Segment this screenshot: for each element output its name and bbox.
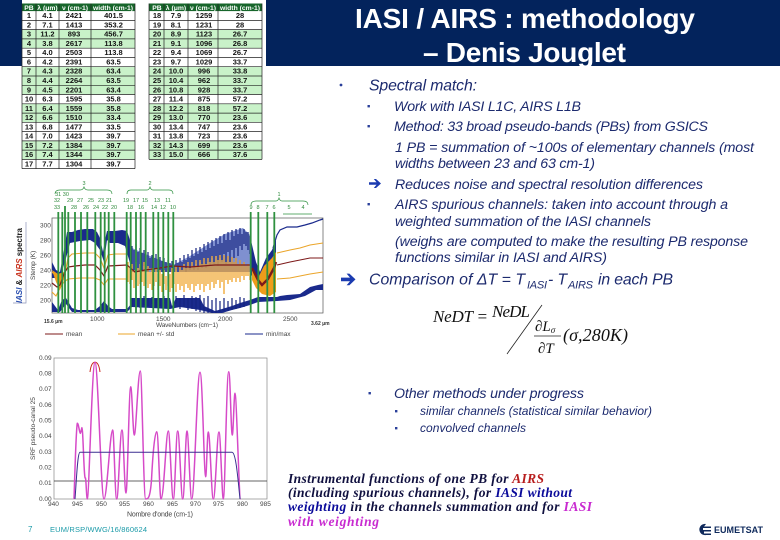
table: pseudo-bands 1 to 17: 4.0 (42, 48, 53, 57)
band number labels and brackets: 11 (165, 198, 171, 204)
table: pseudo-bands 1 to 17: 63.4 (106, 85, 122, 94)
axis labels: 3.62 μm (311, 321, 330, 327)
band number labels and brackets: 15 (142, 198, 148, 204)
table: pseudo-bands 18 to 33: 747 (198, 122, 210, 131)
table: pseudo-bands 18 to 33: 10.8 (169, 85, 183, 94)
table: pseudo-bands 1 to 17: 353.2 (104, 20, 123, 29)
spectral match sub-bullets: AIRS spurious channels: taken into account through a (394, 197, 728, 213)
legend: min/max (266, 331, 291, 338)
table: pseudo-bands 1 to 17: 35.8 (106, 104, 121, 113)
table: pseudo-bands 18 to 33: 1029 (196, 58, 212, 66)
table: pseudo-bands 18 to 33: 11.4 (169, 94, 184, 104)
table: pseudo-bands 18 to 33: 21 (153, 39, 161, 48)
table: pseudo-bands 18 to 33: 962 (198, 76, 210, 85)
table: pseudo-bands 1 to 17: 4.5 (42, 85, 53, 94)
table: pseudo-bands 1 to 17: 893 (68, 30, 80, 39)
x axis labels: 955 (119, 501, 130, 508)
table: pseudo-bands 1 to 17: 6.3 (42, 94, 53, 104)
table: pseudo-bands 1 to 17: 6 (27, 58, 31, 66)
table: pseudo-bands 18 to 33: 24 (153, 67, 162, 76)
table: pseudo-bands 18 to 33: 26.7 (233, 48, 247, 57)
band number labels and brackets: 2 (148, 181, 152, 187)
table: pseudo-bands 1 to 17: 113.8 (104, 39, 123, 48)
band number labels and brackets: 33 (54, 205, 60, 211)
table: pseudo-bands 18 to 33: 875 (198, 94, 210, 104)
band number labels and brackets: 31 30 (55, 192, 69, 198)
logo: EUMETSAT (699, 524, 764, 535)
y axis labels (30, 355, 52, 503)
table: pseudo-bands 18 to 33: 33.8 (233, 67, 247, 76)
table: pseudo-bands 1 to 17: 9 (27, 85, 31, 94)
x axis labels: 965 (167, 501, 178, 508)
table: pseudo-bands 18 to 33: 30 (153, 122, 161, 131)
y axis labels: 0.01 (39, 480, 52, 487)
reference line (54, 480, 267, 482)
axis labels: 220 (40, 282, 51, 290)
table: pseudo-bands 1 to 17: 4.4 (42, 76, 54, 85)
NeDT equation: ∂L (535, 319, 551, 335)
table: pseudo-bands 1 to 17: 63.4 (106, 67, 122, 76)
table: pseudo-bands 1 to 17: 7.1 (42, 20, 53, 29)
comparison statement: in each PB (598, 272, 673, 288)
table: pseudo-bands 1 to 17: 17 (25, 159, 33, 168)
table: pseudo-bands 18 to 33: 8.1 (171, 20, 181, 29)
table: pseudo-bands 1 to 17: ν (cm-1) (62, 5, 88, 12)
table: pseudo-bands 18 to 33: 33.7 (233, 58, 247, 66)
table: pseudo-bands 18 to 33: 20 (153, 30, 161, 39)
table: pseudo-bands 1 to 17: 6.6 (42, 113, 53, 122)
x axis labels (48, 501, 271, 518)
band number labels and brackets: 12 (160, 205, 166, 211)
table: pseudo-bands 18 to 33: 996 (198, 67, 210, 76)
table: pseudo-bands 1 to 17: 3 (27, 30, 31, 39)
table: pseudo-bands 18 to 33: 28 (236, 20, 244, 29)
table: pseudo-bands 18 to 33: 28 (236, 11, 244, 20)
spectral match sub-bullets (368, 99, 755, 266)
table: pseudo-bands 1 to 17: 14 (25, 132, 34, 141)
AIRS red top (90, 362, 100, 372)
header band (0, 0, 780, 66)
IASI pink curve (74, 362, 241, 499)
y axis labels: 0.04 (39, 433, 52, 440)
table: pseudo-bands 1 to 17: 39.7 (106, 159, 121, 168)
arrow: comparison (341, 274, 356, 285)
table: pseudo-bands 18 to 33: 23.6 (233, 141, 247, 150)
table: pseudo-bands 1 to 17: PB (24, 5, 34, 12)
table: pseudo-bands 18 to 33: width (cm-1) (219, 5, 260, 12)
axis labels: 1000 (90, 316, 105, 323)
table: pseudo-bands 1 to 17: 39.7 (106, 141, 121, 150)
y axis labels: 0.06 (39, 402, 52, 409)
NeDT equation (432, 302, 628, 357)
table: pseudo-bands 18 to 33: PB (152, 5, 162, 12)
table: pseudo-bands 1 to 17 (22, 4, 135, 169)
axis labels: 1500 (156, 316, 171, 323)
table: pseudo-bands 1 to 17: 6.4 (42, 104, 54, 113)
table: pseudo-bands 1 to 17: 33.4 (106, 113, 122, 122)
table: pseudo-bands 18 to 33: 9.1 (171, 39, 181, 48)
table: pseudo-bands 1 to 17: 39.7 (106, 150, 121, 159)
table: pseudo-bands 18 to 33: 27 (153, 94, 161, 104)
y axis labels: 0.08 (39, 370, 52, 378)
spectral match sub-bullets: Work with IASI L1C, AIRS L1B (394, 99, 581, 115)
band number labels and brackets: 16 (138, 205, 144, 211)
table: pseudo-bands 18 to 33: 14.3 (169, 141, 183, 150)
max envelope and min band (52, 219, 323, 313)
table: pseudo-bands 18 to 33: 10.4 (169, 76, 184, 85)
table: pseudo-bands 1 to 17: 7 (27, 67, 31, 76)
axis labels: 200 (40, 298, 51, 304)
NeDT equation: NeDL (491, 302, 530, 321)
footer: document reference: EUM/RSP/WWG/16/860624 (50, 525, 147, 534)
table: pseudo-bands 18 to 33: 26.7 (233, 30, 247, 39)
x axis labels: 980 (237, 501, 248, 508)
other methods list: convolved channels (420, 421, 526, 435)
NeDT equation: (σ,280K) (563, 325, 628, 346)
other methods list: Other methods under progress (394, 386, 584, 402)
table: pseudo-bands 18 to 33: 666 (198, 150, 210, 159)
caption: instrumental functions: (including spurious channels), for IASI without (288, 485, 573, 500)
band number labels and brackets: 3 (82, 181, 86, 187)
legend: mean (66, 331, 83, 338)
table: pseudo-bands 1 to 17: 1384 (66, 141, 83, 150)
x axis labels: 945 (72, 501, 83, 508)
axis labels (30, 222, 330, 329)
y axis labels: 0.02 (39, 464, 52, 472)
x axis labels: 970 (190, 501, 201, 508)
table: pseudo-bands 1 to 17: width (cm-1) (92, 5, 133, 12)
table: pseudo-bands 1 to 17: 113.8 (104, 48, 123, 57)
title (355, 3, 695, 68)
table: pseudo-bands 18 to 33: 23.6 (233, 132, 247, 141)
table: pseudo-bands 1 to 17: 2503 (66, 48, 82, 57)
axis labels: WaveNumbers (cm−1) (156, 322, 218, 329)
side label: IASI & AIRS spectra (13, 222, 26, 303)
icon: globe (699, 524, 711, 535)
table: pseudo-bands 18 to 33: 1259 (196, 11, 212, 20)
comparison statement: Comparison of ΔT = T (369, 272, 526, 288)
table: pseudo-bands 18 to 33: 26.8 (233, 39, 247, 48)
axis labels: 280 (40, 238, 51, 244)
band number labels and brackets: 21 (106, 198, 112, 204)
table: pseudo-bands 1 to 17: 8 (27, 76, 31, 85)
table: pseudo-bands 18 to 33: 13.4 (169, 122, 184, 131)
instrumental functions chart (30, 355, 271, 518)
band number labels and brackets: 6 (272, 205, 276, 211)
mean (52, 258, 323, 287)
table: pseudo-bands 1 to 17: 1304 (66, 159, 83, 168)
table: pseudo-bands 18 to 33: 33.7 (233, 76, 247, 85)
comparison statement: AIRS (567, 280, 594, 292)
band number labels and brackets: 18 (127, 205, 133, 211)
table: pseudo-bands 1 to 17: 6.8 (42, 122, 53, 131)
band number labels and brackets: 17 (133, 198, 139, 204)
legend: mean +/- std (138, 331, 175, 338)
table: pseudo-bands 1 to 17: 63.5 (106, 58, 121, 66)
other methods list: similar channels (statistical similar behavior) (420, 404, 652, 418)
table: pseudo-bands 18 to 33: 770 (198, 113, 210, 122)
title: – Denis Jouglet (423, 37, 626, 68)
table: pseudo-bands 18 to 33: ν (cm-1) (190, 5, 216, 12)
table: pseudo-bands 1 to 17: 2328 (66, 67, 82, 76)
table: pseudo-bands 18 to 33: 12.2 (169, 104, 183, 113)
band number labels and brackets: 32 (54, 198, 60, 204)
table: pseudo-bands 1 to 17: 7.2 (42, 141, 53, 150)
table: pseudo-bands 1 to 17: 1 (27, 11, 31, 20)
table: pseudo-bands 18 to 33: 25 (153, 76, 161, 85)
table: pseudo-bands 1 to 17: 35.8 (106, 94, 121, 104)
x axis labels: 960 (143, 501, 154, 508)
NeDT equation: σ (551, 325, 556, 335)
table: pseudo-bands 1 to 17: 4.2 (42, 58, 53, 66)
table: pseudo-bands 18 to 33: 1123 (196, 30, 212, 39)
table: pseudo-bands 1 to 17: 1510 (66, 113, 82, 122)
spectral match sub-bullets: Reduces noise and spectral resolution differences (395, 177, 703, 193)
y axis labels: 0.03 (39, 449, 52, 456)
table: pseudo-bands 18 to 33: 33.7 (233, 85, 247, 94)
table: pseudo-bands 1 to 17: 10 (25, 94, 33, 104)
table: pseudo-bands 1 to 17: 11.2 (40, 30, 55, 39)
band number labels and brackets: 1 (277, 192, 281, 198)
footer: page number: 7 (28, 525, 33, 534)
spectral match sub-bullets: 1 PB = summation of ~100s of elementary channels (most (395, 140, 755, 156)
table: pseudo-bands 18 to 33: λ (μm) (166, 4, 186, 12)
table: pseudo-bands 18 to 33: 57.2 (233, 94, 247, 104)
band number labels and brackets: 27 (77, 198, 83, 204)
table: pseudo-bands 18 to 33: 32 (153, 141, 161, 150)
comparison statement: - T (548, 272, 568, 288)
table: pseudo-bands 1 to 17: 11 (25, 104, 33, 113)
band number labels and brackets: 25 (88, 198, 94, 204)
table: pseudo-bands 18 to 33: 29 (153, 113, 161, 122)
table: pseudo-bands 18 to 33: 15.0 (169, 150, 183, 159)
table: pseudo-bands 1 to 17: 7.7 (42, 159, 53, 168)
table: pseudo-bands 18 to 33: 723 (198, 132, 210, 141)
table: pseudo-bands 1 to 17: 2391 (66, 58, 82, 66)
x axis labels: 985 (260, 501, 271, 508)
spectra chart (30, 181, 330, 338)
table: pseudo-bands 18 to 33 (149, 4, 262, 159)
table: pseudo-bands 1 to 17: 2 (27, 20, 31, 29)
table: pseudo-bands 1 to 17: 456.7 (104, 30, 123, 39)
x axis labels: Nombre d'onde (cm-1) (127, 512, 193, 518)
green band markers (58, 206, 274, 313)
table: pseudo-bands 1 to 17: 13 (25, 122, 33, 131)
band number labels and brackets: 14 (151, 205, 157, 211)
x axis labels: 950 (96, 501, 107, 508)
axis labels: 15.6 μm (44, 319, 63, 325)
band number labels and brackets: 5 (287, 205, 291, 211)
table: pseudo-bands 18 to 33: 33 (153, 150, 161, 159)
table: pseudo-bands 18 to 33: 699 (198, 141, 210, 150)
table: pseudo-bands 1 to 17: 4.1 (42, 11, 53, 20)
axis labels: Stemp (K) (30, 251, 37, 280)
x axis labels: 940 (48, 501, 59, 508)
x axis labels: 975 (213, 501, 224, 508)
caption: instrumental functions: weighting in the channels summation and for IASI (288, 499, 593, 514)
NeDT equation: ∂T (538, 341, 555, 357)
table: pseudo-bands 18 to 33: 13.8 (169, 132, 183, 141)
legend (45, 331, 291, 338)
band number labels and brackets: 23 (98, 198, 104, 204)
table: pseudo-bands 18 to 33: 1096 (196, 39, 212, 48)
table: pseudo-bands 18 to 33: 1069 (196, 48, 212, 57)
table: pseudo-bands 1 to 17: 1413 (66, 20, 82, 29)
band number labels and brackets: 10 (170, 205, 176, 211)
band number labels and brackets: 8 (256, 205, 260, 211)
y axis labels: SRF pseudo-canal 25 (30, 397, 37, 460)
table: pseudo-bands 1 to 17: 39.7 (106, 132, 121, 141)
table: pseudo-bands 1 to 17: 2264 (66, 76, 83, 85)
spectral match sub-bullets: Method: 33 broad pseudo-bands (PBs) from GSICS (394, 119, 709, 135)
table: pseudo-bands 18 to 33: 31 (153, 132, 161, 141)
band number labels and brackets: 24 (93, 205, 99, 211)
spectral match bullet: Spectral match: (369, 78, 477, 94)
table: pseudo-bands 1 to 17: λ (μm) (37, 4, 58, 12)
table: pseudo-bands 18 to 33: 13.0 (169, 113, 183, 122)
band number labels and brackets: 20 (111, 205, 117, 211)
axis labels: 2500 (283, 316, 298, 323)
band number labels and brackets: 7 (265, 205, 269, 211)
table: pseudo-bands 18 to 33: 18 (153, 11, 161, 20)
spectral match sub-bullets: widths between 23 and 63 cm-1) (395, 156, 595, 172)
table: pseudo-bands 1 to 17: 15 (25, 141, 33, 150)
table: pseudo-bands 18 to 33: 28 (153, 104, 161, 113)
caption: instrumental functions: Instrumental functions of one PB for AIRS (287, 471, 544, 486)
caption: instrumental functions: with weighting (288, 514, 379, 529)
table: pseudo-bands 1 to 17: 1595 (66, 94, 82, 104)
table: pseudo-bands 18 to 33: 818 (198, 104, 210, 113)
band number labels and brackets (54, 181, 312, 214)
table: pseudo-bands 1 to 17: 1344 (66, 150, 83, 159)
logo: EUMETSAT: EUMETSAT (714, 525, 764, 535)
table: pseudo-bands 1 to 17: 5 (27, 48, 31, 57)
table: pseudo-bands 18 to 33: 10.0 (169, 67, 183, 76)
axis labels: 240 (40, 268, 51, 274)
mean plus or minus std (52, 243, 323, 296)
other methods list (368, 386, 652, 435)
y axis labels: 0.05 (39, 418, 52, 424)
table: pseudo-bands 1 to 17: 1477 (66, 122, 82, 131)
axis labels: 300 (40, 222, 51, 230)
title: IASI / AIRS : methodology (355, 3, 695, 34)
table: pseudo-bands 18 to 33: 23 (153, 58, 161, 66)
table: pseudo-bands 1 to 17: 2201 (66, 85, 82, 94)
table: pseudo-bands 1 to 17: 7.4 (42, 150, 54, 159)
table: pseudo-bands 18 to 33: 23.6 (233, 113, 247, 122)
band number labels and brackets: 29 (67, 198, 73, 204)
band number labels and brackets: 9 (249, 205, 253, 211)
table: pseudo-bands 1 to 17: 7.0 (42, 132, 53, 141)
table: pseudo-bands 1 to 17: 401.5 (104, 11, 123, 20)
table: pseudo-bands 18 to 33: 37.6 (233, 150, 247, 159)
table: pseudo-bands 1 to 17: 4 (27, 39, 32, 48)
table: pseudo-bands 1 to 17: 12 (25, 113, 33, 122)
table: pseudo-bands 18 to 33: 7.9 (171, 11, 181, 20)
table: pseudo-bands 18 to 33: 928 (198, 85, 210, 94)
table: pseudo-bands 18 to 33: 57.2 (233, 104, 247, 113)
comparison statement (341, 272, 673, 292)
table: pseudo-bands 18 to 33: 9.7 (171, 58, 181, 66)
table: pseudo-bands 1 to 17: 2617 (66, 39, 82, 48)
table: pseudo-bands 1 to 17: 63.5 (106, 76, 121, 85)
spectral match sub-bullets: functions similar in IASI and AIRS) (395, 250, 607, 266)
y axis labels: 0.09 (39, 355, 52, 362)
table: pseudo-bands 18 to 33: 8.9 (171, 30, 181, 39)
axis labels: 260 (40, 252, 51, 260)
table: pseudo-bands 18 to 33: 19 (153, 20, 161, 29)
table: pseudo-bands 1 to 17: 33.5 (106, 122, 121, 131)
comparison statement: IASI (527, 280, 547, 292)
arrow: reduces noise (369, 179, 381, 188)
table: pseudo-bands 18 to 33: 23.6 (233, 122, 247, 131)
band number labels and brackets: 22 (102, 205, 108, 211)
table: pseudo-bands 18 to 33: 22 (153, 48, 161, 57)
caption: instrumental functions (287, 471, 593, 529)
spectral match sub-bullets: (weighs are computed to make the resulting PB response (395, 234, 748, 250)
band number labels and brackets: 26 (83, 205, 89, 211)
side label: IASI & AIRS spectra: IASI & AIRS spectra (15, 227, 24, 303)
y axis labels: 0.07 (39, 386, 52, 393)
table: pseudo-bands 1 to 17: 2421 (66, 11, 82, 20)
NeDT equation: NeDT = (432, 307, 488, 326)
band number labels and brackets: 13 (154, 198, 160, 204)
table: pseudo-bands 1 to 17: 3.8 (42, 39, 53, 48)
table: pseudo-bands 18 to 33: 26 (153, 85, 161, 94)
spectral match sub-bullets: weighted summation of the IASI channels (395, 214, 651, 230)
table: pseudo-bands 1 to 17: 16 (25, 150, 33, 159)
axis labels: 2000 (218, 316, 233, 323)
band number labels and brackets: 28 (71, 205, 77, 211)
table: pseudo-bands 18 to 33: 1231 (196, 20, 212, 29)
y axis labels: 0.00 (39, 496, 52, 503)
AIRS and IASI pseudo-band response (75, 452, 240, 499)
table: pseudo-bands 18 to 33: 9.4 (171, 48, 182, 57)
band number labels and brackets: 4 (301, 205, 305, 211)
table: pseudo-bands 1 to 17: 4.3 (42, 67, 53, 76)
table: pseudo-bands 1 to 17: 1423 (66, 132, 82, 141)
band number labels and brackets: 19 (123, 198, 129, 204)
table: pseudo-bands 1 to 17: 1559 (66, 104, 82, 113)
